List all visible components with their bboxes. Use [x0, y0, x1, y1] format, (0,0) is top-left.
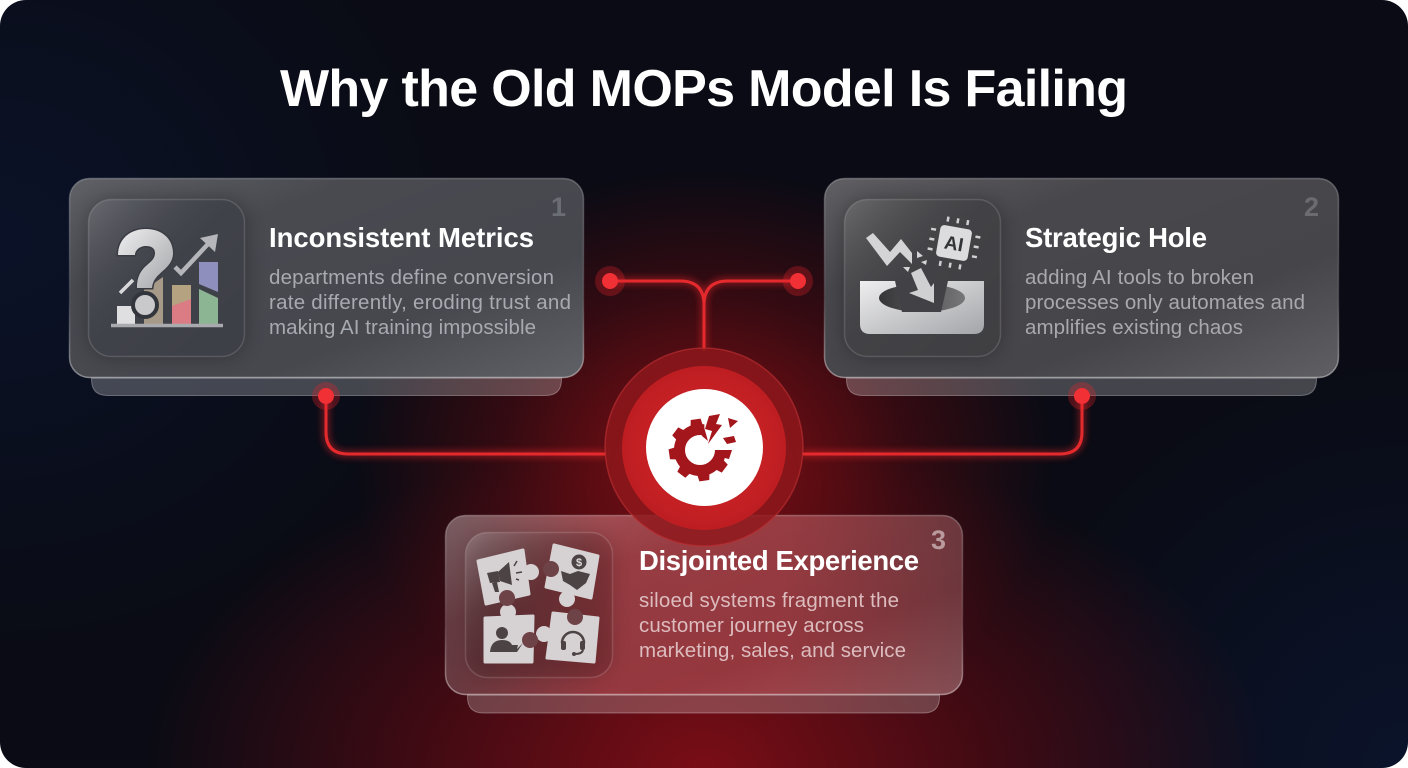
- icon: broken gear: [668, 414, 740, 482]
- connector: left line: [326, 396, 606, 454]
- icon tile: AI over hole: [844, 200, 1000, 356]
- title: Why the Old MOPs Model Is Failing: [280, 60, 1128, 118]
- panel 3: disjointed experience: [446, 516, 962, 713]
- description: marketing, sales, and service: [639, 639, 906, 662]
- description: making AI training impossible: [269, 316, 536, 339]
- connector: top branch: [595, 266, 813, 350]
- description: rate differently, eroding trust and: [269, 291, 571, 314]
- heading: Disjointed Experience: [639, 545, 919, 576]
- icon tile: puzzle: $: [576, 557, 582, 569]
- icon tile: metrics: [88, 200, 244, 356]
- number 1: 1: [551, 192, 566, 222]
- panel 2: strategic hole: [824, 178, 1338, 396]
- description: adding AI tools to broken: [1025, 266, 1254, 289]
- description: siloed systems fragment the: [639, 589, 899, 612]
- connector: right line: [802, 396, 1082, 454]
- number 3: 3: [931, 525, 946, 555]
- panel 1: inconsistent metrics: [70, 178, 584, 396]
- description: amplifies existing chaos: [1025, 316, 1243, 339]
- description: [269, 266, 571, 339]
- connector nodes on cards: [312, 382, 1096, 410]
- number 2: 2: [1304, 192, 1319, 222]
- icon tile: AI over hole: AI: [943, 232, 965, 256]
- description: [1025, 266, 1305, 339]
- description: customer journey across: [639, 614, 864, 637]
- description: [639, 589, 906, 662]
- heading: Strategic Hole: [1025, 222, 1207, 253]
- icon tile: puzzle: [466, 532, 612, 678]
- description: departments define conversion: [269, 266, 554, 289]
- central hub: broken gear: [605, 348, 803, 546]
- heading: Inconsistent Metrics: [269, 222, 534, 253]
- description: processes only automates and: [1025, 291, 1305, 314]
